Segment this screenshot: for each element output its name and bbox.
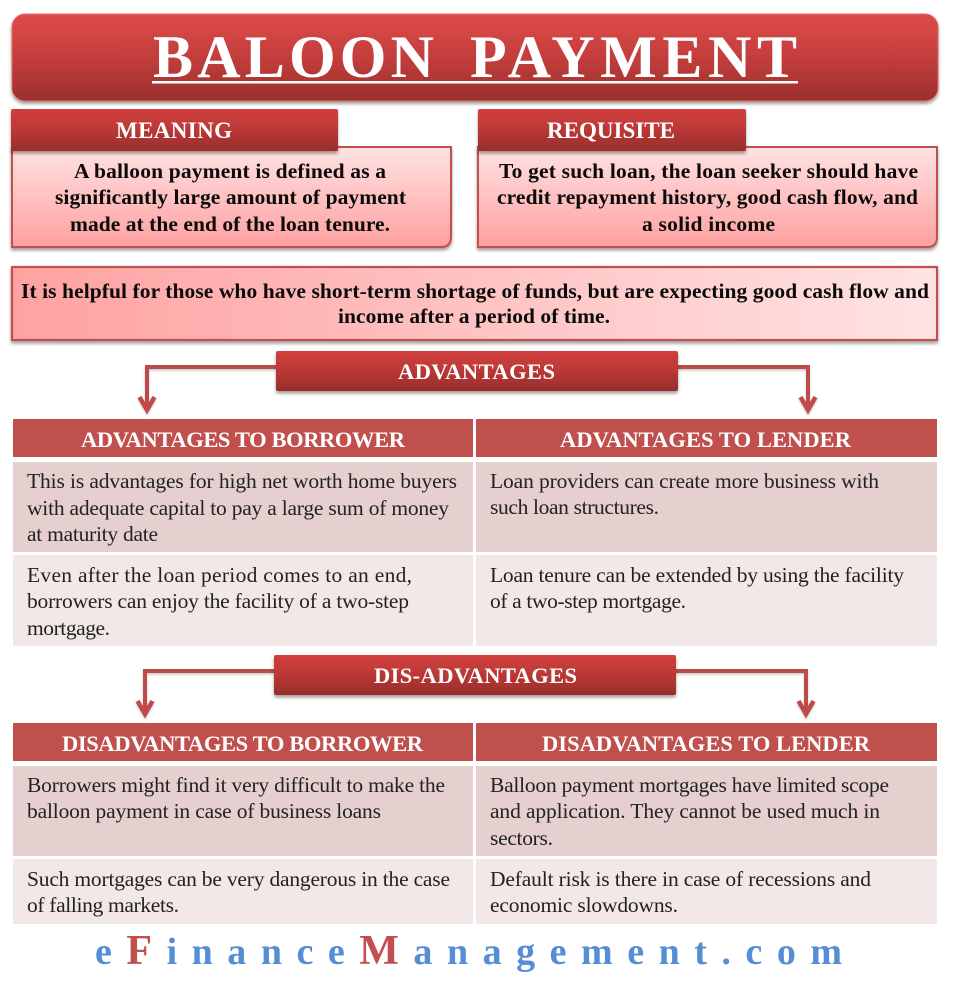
- callout: helpful for: It is helpful for those who have short-term shortage of funds, but are expecting good cash flow and: [21, 279, 929, 303]
- column: advantages to lender: Loan providers can create more business with: [490, 469, 879, 493]
- callout: helpful for: income after a period of time.: [338, 304, 610, 328]
- panel: requisite: credit repayment history, good cash flow, and: [497, 185, 918, 209]
- table: disadvantages: [13, 723, 937, 924]
- heading: dis-advantages: [274, 655, 676, 695]
- callout: helpful for: [12, 267, 937, 340]
- column: advantages to lender: Loan tenure can be extended by using the facility: [490, 563, 904, 587]
- column: disadvantages to borrower: Borrowers might find it very difficult to make the: [27, 773, 445, 797]
- panel: requisite: a solid income: [642, 212, 775, 236]
- column: disadvantages to borrower: balloon payment in case of business loans: [27, 799, 381, 823]
- column: disadvantages to borrower: DISADVANTAGES TO BORROWER: [62, 731, 424, 756]
- heading: advantages: [276, 351, 678, 391]
- panel: requisite: [478, 109, 937, 247]
- arrow: disadvantages to lender: [676, 671, 814, 714]
- column: disadvantages to borrower: Such mortgages can be very dangerous in the case: [27, 867, 450, 891]
- title banner: [12, 14, 938, 101]
- arrow: advantages to lender: [678, 367, 816, 410]
- column: disadvantages to lender: Balloon payment mortgages have limited scope: [490, 773, 889, 797]
- column: disadvantages to borrower: [13, 723, 473, 924]
- column: advantages to lender: of a two-step mortgage.: [490, 589, 686, 613]
- column: disadvantages to lender: and application. They cannot be used much in: [490, 799, 880, 823]
- column: disadvantages to lender: sectors.: [490, 826, 553, 850]
- column: disadvantages to lender: economic slowdowns.: [490, 893, 678, 917]
- column: advantages to borrower: at maturity date: [27, 522, 158, 546]
- column: advantages to borrower: [13, 419, 473, 646]
- table: advantages: [13, 419, 937, 646]
- arrow: disadvantages to borrower: [138, 671, 274, 714]
- column: advantages to lender: such loan structures.: [490, 495, 659, 519]
- column: disadvantages to lender: [476, 723, 937, 924]
- panel: meaning: significantly large amount of payment: [55, 185, 407, 209]
- column: advantages to borrower: borrowers can enjoy the facility of a two-step: [27, 589, 409, 613]
- panel: meaning: made at the end of the loan tenure.: [70, 212, 390, 236]
- panel: requisite: REQUISITE: [547, 118, 675, 143]
- heading: dis-advantages: DIS-ADVANTAGES: [374, 663, 577, 688]
- column: disadvantages to lender: DISADVANTAGES TO LENDER: [542, 731, 871, 756]
- footer brand: e F inance M anagement.com: [95, 928, 842, 974]
- title banner: PAYMENT: [470, 24, 797, 90]
- column: disadvantages to lender: Default risk is there in case of recessions and: [490, 867, 871, 891]
- column: advantages to borrower: This is advantages for high net worth home buyers: [27, 469, 457, 493]
- title banner: BALOON: [153, 24, 434, 90]
- panel: meaning: A balloon payment is defined as a: [74, 159, 386, 183]
- column: advantages to borrower: Even after the loan period comes to an end,: [27, 563, 412, 587]
- panel: requisite: To get such loan, the loan seeker should have: [499, 159, 918, 183]
- column: advantages to borrower: with adequate capital to pay a large sum of money: [27, 496, 449, 520]
- panel: meaning: MEANING: [116, 118, 232, 143]
- column: advantages to lender: ADVANTAGES TO LENDER: [560, 427, 852, 452]
- column: advantages to borrower: mortgage.: [27, 616, 110, 640]
- heading: advantages: ADVANTAGES: [398, 359, 555, 384]
- arrow: advantages to borrower: [140, 367, 276, 410]
- column: advantages to lender: [476, 419, 937, 646]
- panel: meaning: [11, 109, 451, 247]
- column: advantages to borrower: ADVANTAGES TO BORROWER: [81, 427, 406, 452]
- column: disadvantages to borrower: of falling markets.: [27, 893, 179, 917]
